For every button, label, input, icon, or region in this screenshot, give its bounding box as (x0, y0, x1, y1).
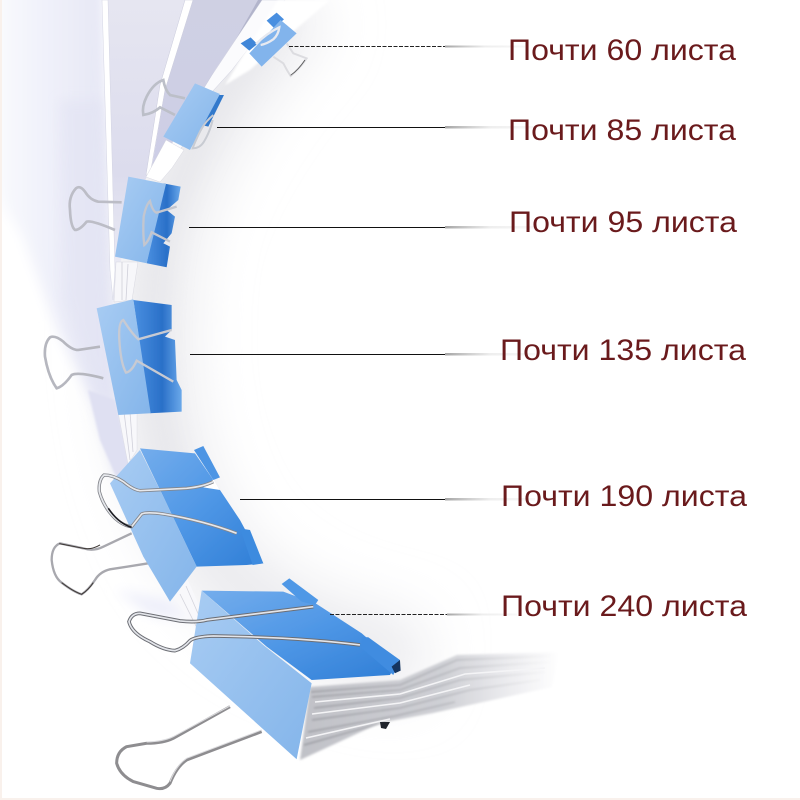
wire (256, 27, 279, 45)
paper between clips 3 and 4 (114, 262, 138, 302)
white sheet strip 1 (102, 0, 115, 300)
lower page (88, 390, 130, 490)
front wire (119, 320, 173, 382)
label: 135 sheets: Почти 135 листа (500, 334, 747, 367)
label: 95 sheets: Почти 95 листа (509, 206, 738, 239)
page lines (304, 656, 550, 745)
paper between clips 2 and 3 (146, 140, 184, 182)
clip 2: 85 sheets (143, 80, 224, 150)
paper stack (300, 652, 560, 760)
back tab left (241, 37, 257, 51)
left page (0, 0, 132, 480)
label: 240 sheets: Почти 240 листа (501, 590, 748, 623)
front body (110, 450, 197, 602)
body front (249, 20, 297, 67)
upper tube (282, 578, 318, 605)
back tube (202, 95, 224, 127)
line 95 (189, 226, 445, 228)
clip 6: 240 sheets (117, 578, 401, 789)
paper shadow (151, 0, 420, 660)
lower tube (240, 528, 263, 565)
bottom wire (193, 115, 213, 148)
lower tube (362, 637, 400, 675)
line 135 (190, 354, 445, 356)
line 60 (289, 46, 445, 48)
back handle (117, 707, 262, 789)
paper between clips 4 and 5 (118, 412, 137, 464)
dark body (140, 448, 263, 567)
curved paper sheets (0, 0, 330, 635)
lower lavender tint (115, 590, 190, 620)
clip 5: 190 sheets (52, 446, 263, 602)
white sheet strip 3 (156, 0, 285, 178)
front wire (143, 201, 177, 245)
line 85 (217, 126, 445, 128)
back handle (52, 533, 148, 594)
clip 1: 60 sheets (241, 13, 307, 76)
dark body (147, 183, 181, 267)
left page solid edge (60, 100, 115, 400)
middle page (107, 0, 190, 290)
label: 60 sheets: Почти 60 листа (508, 34, 737, 67)
dark body (202, 591, 397, 680)
dark body (133, 300, 182, 413)
upper tube (194, 446, 220, 480)
label: 190 sheets: Почти 190 листа (501, 480, 748, 513)
white sheet strip 2 (146, 0, 193, 175)
paper between clips 5 and 6 (174, 578, 202, 635)
upper glow (225, 0, 330, 85)
front body (190, 591, 312, 759)
front wire (129, 607, 360, 651)
body (163, 83, 220, 150)
front body (97, 299, 151, 415)
back handle (70, 187, 122, 230)
front wire (99, 475, 237, 533)
label: 85 sheets: Почти 85 листа (508, 114, 737, 147)
hidden handle end (380, 722, 390, 729)
clip 4: 135 sheets (45, 299, 182, 415)
dark sliver (214, 0, 278, 78)
front body (115, 177, 166, 263)
leader lines (189, 46, 535, 616)
back tab right (267, 13, 284, 28)
line 190 (240, 498, 445, 500)
notch (203, 479, 220, 490)
clip 3: 95 sheets (70, 177, 181, 267)
back handle (143, 80, 185, 115)
back handle (45, 337, 103, 388)
handle (273, 43, 307, 76)
line 240 (330, 614, 447, 616)
back page (150, 0, 262, 178)
